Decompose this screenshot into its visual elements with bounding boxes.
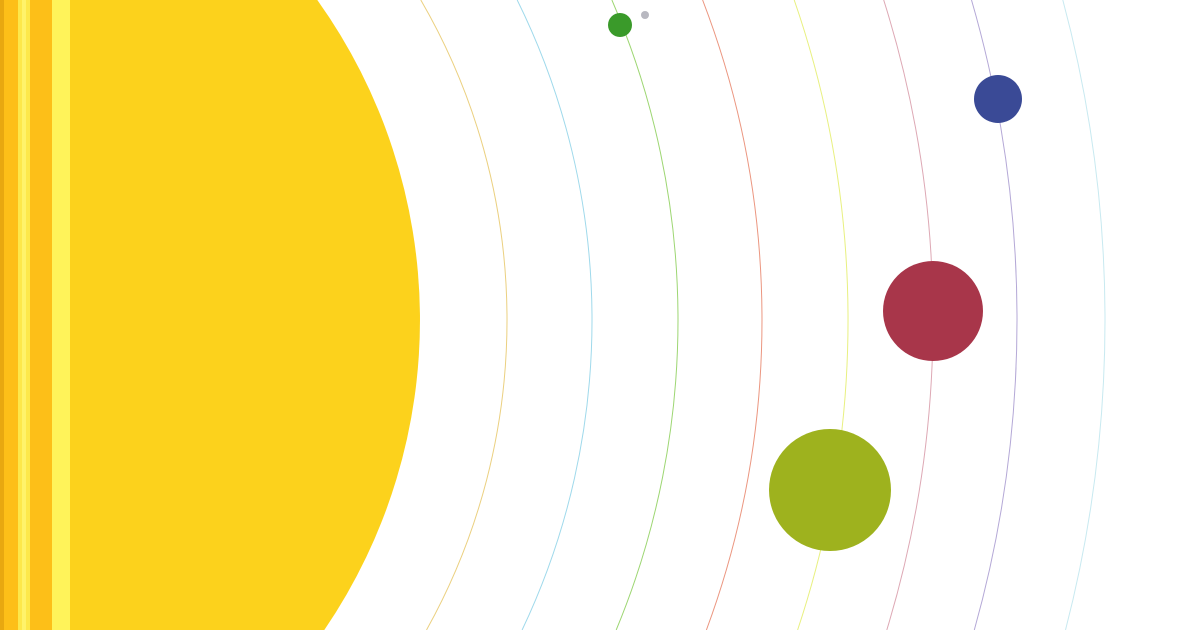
planet: blue xyxy=(974,75,1022,123)
planet: olive xyxy=(769,429,891,551)
planet: red xyxy=(883,261,983,361)
planet: green small xyxy=(608,13,632,37)
planet: grey moon xyxy=(641,11,649,19)
sun xyxy=(0,0,420,630)
orbits xyxy=(421,0,1105,630)
